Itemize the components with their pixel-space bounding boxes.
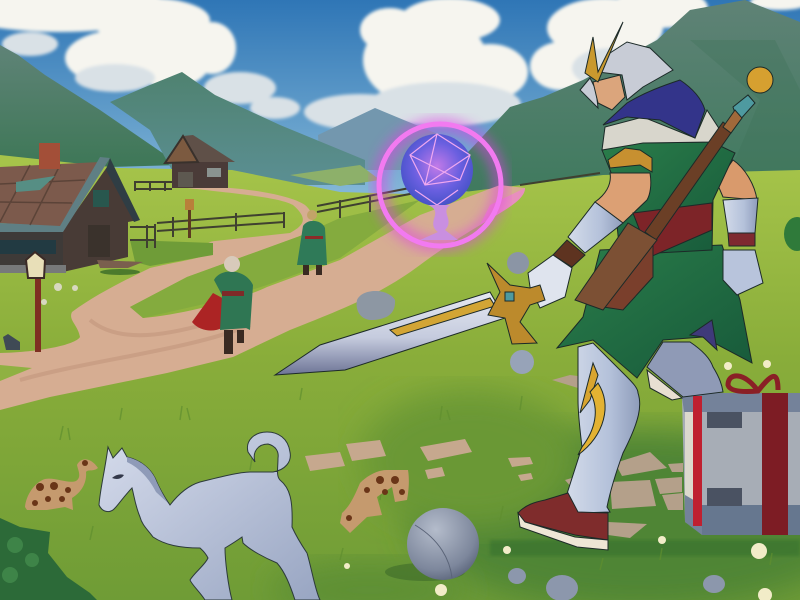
left arm — [595, 173, 651, 223]
bag lower — [590, 240, 653, 310]
right hand — [723, 250, 763, 295]
left gauntlet — [568, 202, 623, 253]
gift bow — [728, 376, 778, 391]
rear shoe — [647, 370, 682, 400]
courtyard critters — [41, 283, 78, 305]
meadow ground — [0, 155, 800, 600]
flowers — [344, 360, 772, 600]
large stone ball — [385, 508, 479, 581]
main cottage — [0, 143, 143, 275]
inner grass wedge — [130, 200, 420, 318]
sky — [0, 0, 800, 220]
crystal orb — [401, 134, 473, 206]
horns — [585, 22, 623, 82]
shoulder armor — [602, 110, 720, 150]
gauntlet hand — [528, 255, 572, 308]
right gauntlet — [723, 198, 758, 233]
left mountain — [0, 45, 180, 170]
fences — [130, 173, 600, 248]
boot — [518, 493, 608, 540]
shoulder badge — [608, 148, 652, 172]
grass tufts — [60, 388, 772, 570]
rear leg — [647, 342, 723, 397]
right arm — [717, 160, 757, 200]
silver horse — [99, 432, 320, 600]
magic orb ring — [379, 124, 501, 246]
face — [593, 75, 625, 110]
bush right — [784, 217, 800, 251]
pants skirt — [557, 245, 752, 378]
gift box — [682, 376, 800, 535]
villager with red cape — [192, 256, 253, 354]
staff — [645, 122, 733, 240]
spotted ferret left — [25, 459, 98, 510]
front leg armor — [565, 343, 640, 513]
right mountains — [430, 0, 800, 195]
dirt path — [0, 185, 525, 410]
small grass patch lower left — [0, 365, 32, 381]
far mountain — [318, 108, 440, 170]
lantern post — [26, 252, 45, 352]
back cottage — [165, 135, 235, 188]
orb stand — [420, 205, 458, 240]
grass patch by cottage — [130, 240, 213, 266]
torso — [602, 142, 735, 255]
hair — [598, 42, 673, 100]
bush lower left — [0, 518, 97, 600]
paving stones — [305, 375, 683, 538]
distant villager — [297, 210, 327, 275]
leather bag — [575, 223, 657, 310]
small cat — [3, 334, 20, 350]
belt sash — [633, 203, 712, 257]
grey boulder near path — [357, 291, 395, 320]
centre mountain — [110, 72, 365, 185]
spotted ferret right — [340, 470, 409, 533]
small stones — [508, 568, 725, 600]
far meadow patch — [290, 165, 380, 186]
clouds — [0, 0, 800, 130]
small lamp post — [185, 199, 194, 238]
scarf — [603, 80, 705, 138]
small boulder upper — [507, 252, 529, 274]
hero — [518, 22, 773, 550]
small boulder middle — [510, 350, 534, 374]
sword — [275, 263, 545, 375]
